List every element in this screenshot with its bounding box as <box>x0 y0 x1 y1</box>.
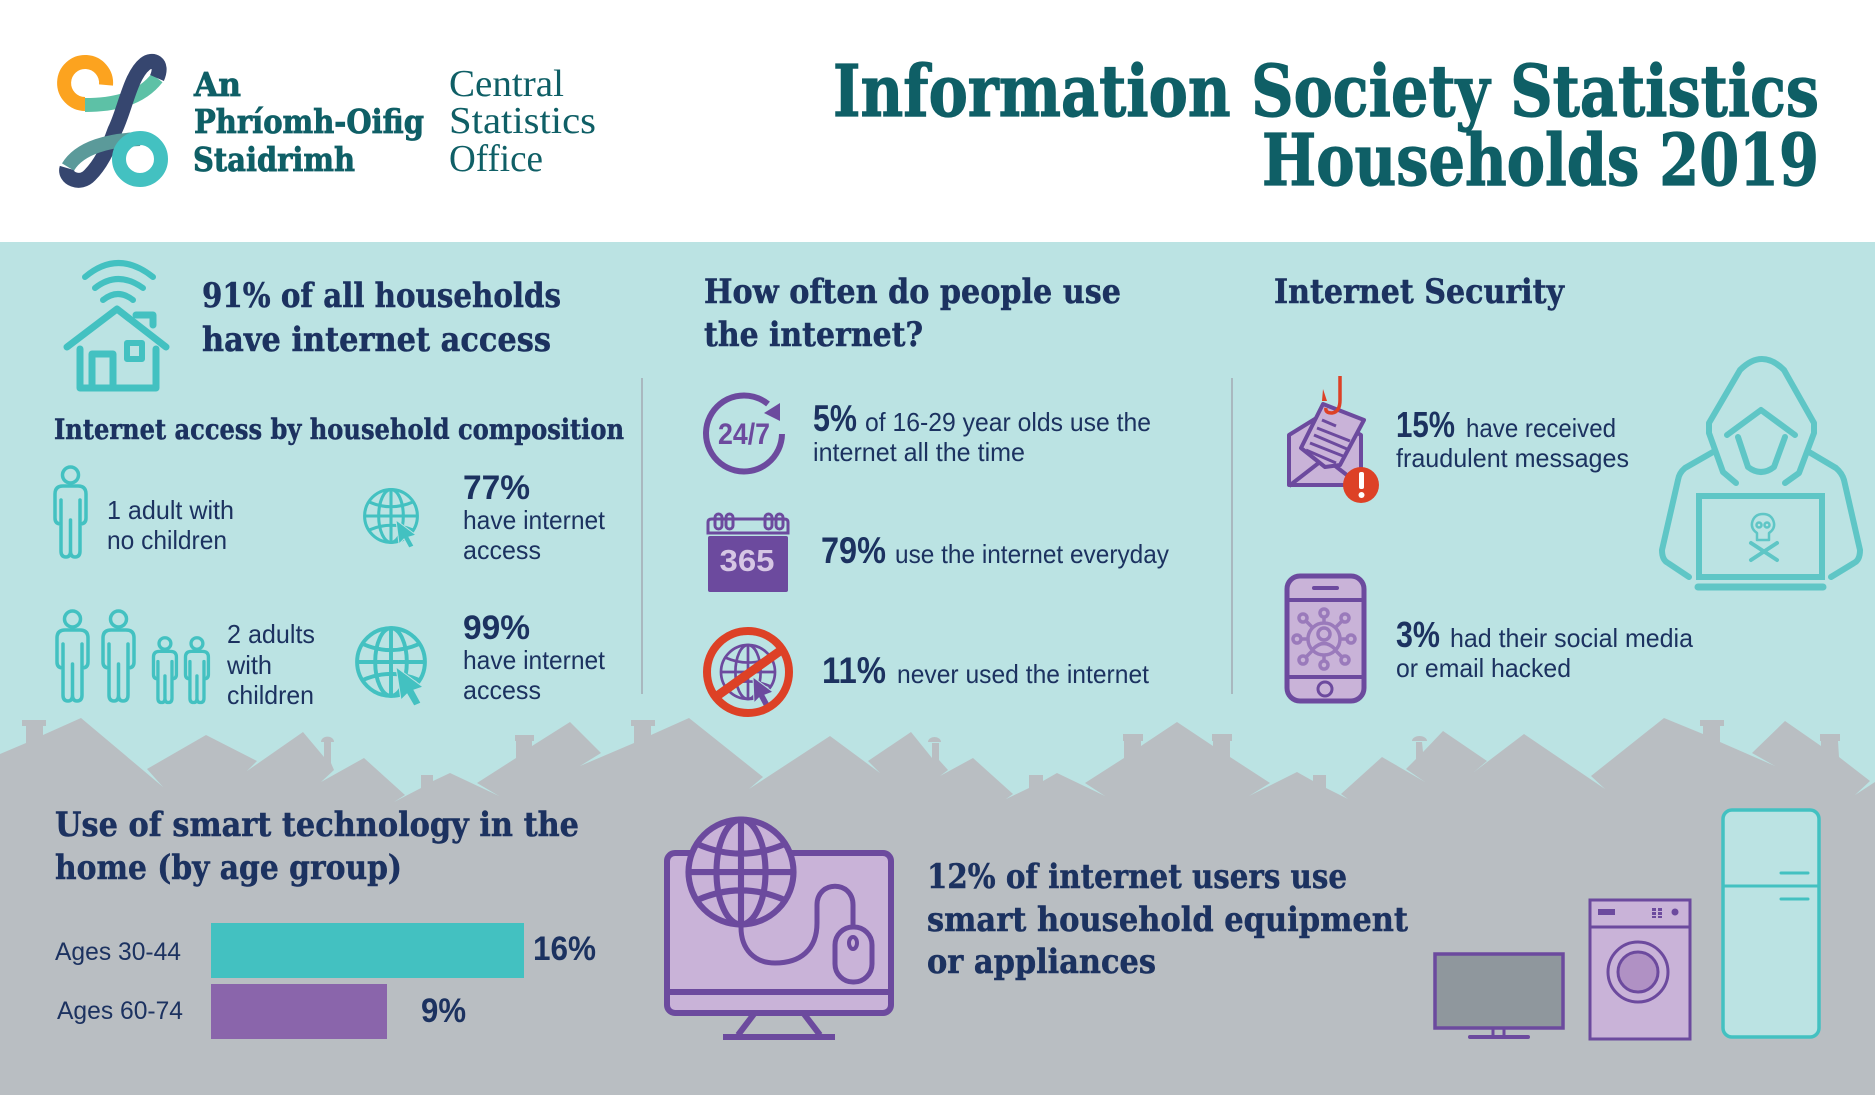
stat: 79%: 79% <box>821 530 886 571</box>
stat: 3%: or email hacked <box>1396 653 1571 683</box>
stat: 15%: have received <box>1466 413 1616 443</box>
heading: smart technology: home (by age group) <box>55 848 402 888</box>
stat: 15%: fraudulent messages <box>1396 443 1629 473</box>
stat: 5%: 5% <box>813 398 857 439</box>
logo Irish name <box>193 65 424 179</box>
stat: 5%: of 16-29 year olds use the <box>865 407 1151 437</box>
bar chart: age groups: Ages 30-44 <box>55 938 181 966</box>
panel: smart technology <box>55 805 1819 1039</box>
stat: 15%: 15% <box>1396 404 1455 445</box>
icon: phishing envelope <box>1289 376 1379 503</box>
skyline and lower panel <box>0 718 1875 1095</box>
bar chart: age groups: 16% <box>533 930 596 968</box>
heading: 91%: 91% of all households <box>202 276 561 316</box>
stat: 99% <box>463 609 606 705</box>
text: 12% smart equipment: 12% of internet users use <box>927 857 1347 897</box>
bar chart: age groups <box>55 923 596 1039</box>
stat: 77%: have internet <box>463 505 606 535</box>
stat: 77% <box>463 469 606 565</box>
label: 2 adults: children <box>227 680 314 710</box>
stat: 11% <box>822 650 1150 691</box>
logo English name: Statistics <box>449 100 596 142</box>
icon: 24/7: 24/7 <box>718 418 770 451</box>
stat: 99%: 99% <box>463 609 530 647</box>
icon: globe large <box>357 628 425 706</box>
stat: 3%: had their social media <box>1450 623 1694 653</box>
stat: 77%: 77% <box>463 469 530 507</box>
icon: phone <box>1287 576 1364 701</box>
heading: smart technology <box>55 805 579 888</box>
heading: smart technology: Use of smart technology in the <box>55 805 579 845</box>
stat: 5%: internet all the time <box>813 437 1025 467</box>
stat: 11%: never used the internet <box>897 659 1150 689</box>
heading: how often: the internet? <box>704 315 923 355</box>
stat: 99%: access <box>463 675 541 705</box>
bar chart: age groups: Ages 60-74 <box>57 997 183 1025</box>
logo Irish name: Staidrimh <box>193 140 355 179</box>
stat: 77%: access <box>463 535 541 565</box>
sky band <box>0 242 1875 842</box>
stat: 79% <box>821 530 1169 571</box>
icon: hacker with laptop <box>1662 359 1860 587</box>
stat: 99%: have internet <box>463 645 606 675</box>
icon: monitor with globe and mouse <box>667 820 891 1037</box>
heading: how often <box>704 272 1121 355</box>
stat: 3% <box>1396 614 1694 683</box>
stat: 15% <box>1396 404 1629 473</box>
icon: two adults two children <box>57 611 208 703</box>
stat: 5% <box>813 398 1151 467</box>
icon: washing machine <box>1590 900 1690 1039</box>
logo <box>64 61 596 180</box>
label: 1 adult <box>107 495 234 555</box>
text: 12% smart equipment: smart household equipment <box>927 900 1408 940</box>
heading: how often: How often do people use <box>704 272 1121 312</box>
stat: 3%: 3% <box>1396 614 1440 655</box>
label: 2 adults: with <box>226 650 272 680</box>
icon: no internet <box>707 631 789 713</box>
icon: house with wifi <box>67 263 166 388</box>
text: 12% smart equipment: or appliances <box>927 942 1156 982</box>
label: 2 adults: 2 adults <box>227 619 315 649</box>
icon: globe small <box>365 490 417 548</box>
text: 12% smart equipment <box>927 857 1408 982</box>
bar chart: age groups: 9% <box>421 992 466 1030</box>
panel: internet security <box>1274 272 1860 701</box>
icon: calendar 365 <box>708 514 788 592</box>
logo English name: Office <box>449 138 543 180</box>
heading: internet security: Internet Security <box>1274 272 1565 312</box>
panel: household access <box>54 263 624 710</box>
heading: household composition: Internet access by household composition <box>54 413 624 446</box>
title <box>833 49 1819 202</box>
icon: television <box>1435 954 1563 1037</box>
heading: 91% <box>202 276 561 360</box>
icon: one adult <box>55 467 86 557</box>
icon: fridge <box>1723 810 1819 1037</box>
logo Irish name: Phríomh-Oifig <box>194 102 424 141</box>
logo mark <box>64 61 161 180</box>
panel: how often <box>704 272 1169 713</box>
stat: 11%: 11% <box>822 650 886 691</box>
label: 1 adult: no children <box>107 525 227 555</box>
icon: calendar 365: 365 <box>720 543 774 578</box>
stat: 79%: use the internet everyday <box>895 539 1169 569</box>
logo English name: Central <box>449 63 564 105</box>
heading: 91%: have internet access <box>202 320 551 360</box>
label: 1 adult: 1 adult with <box>107 495 234 525</box>
logo English name <box>449 63 596 180</box>
logo Irish name: An <box>193 65 241 104</box>
icon: 24/7 <box>706 395 782 471</box>
label: 2 adults <box>226 619 315 710</box>
